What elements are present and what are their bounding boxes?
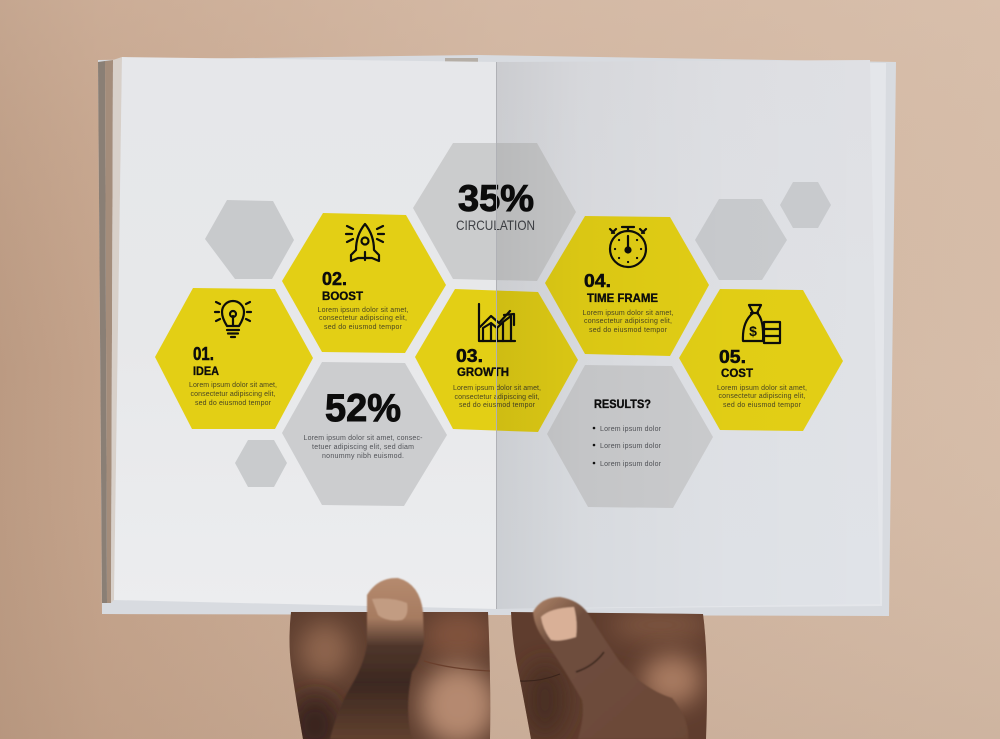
right thumbnail: [541, 607, 577, 641]
hexagon: decorative gray lower left: [235, 440, 287, 487]
icon: light bulb: [215, 301, 251, 337]
bullet list: Lorem ipsum dolor: [600, 426, 662, 433]
spine fold line: [496, 62, 498, 609]
body text: sed do eiusmod tempor: [589, 327, 668, 334]
panel: 02 boost: [282, 213, 446, 353]
panel: 03 growth: [415, 289, 578, 432]
right page: [497, 60, 880, 609]
icon: dollar sign: $: [749, 323, 757, 339]
number: 02: 02.: [322, 269, 347, 289]
bullet list: Lorem ipsum dolor: [600, 443, 662, 450]
left page: [114, 57, 497, 609]
hexagon: decorative gray small right: [780, 182, 831, 228]
page edges on the left: [98, 57, 122, 603]
icon: money bag and coins: [743, 305, 780, 343]
body text: consectetur adipiscing elit,: [319, 315, 407, 322]
body text: tetuer adipiscing elit, sed diam: [312, 444, 414, 451]
cover top band near spine: [445, 58, 478, 62]
body text: Lorem ipsum dolor sit amet,: [453, 385, 541, 392]
number: 04: 04.: [584, 271, 611, 291]
title: growth: GROWTH: [457, 365, 509, 379]
body text: nonummy nibh euismod.: [322, 453, 404, 460]
stat: 52%: 52%: [325, 387, 401, 430]
body text: Lorem ipsum dolor sit amet,: [189, 382, 277, 389]
icon: rocket: [346, 224, 384, 261]
body text: [453, 385, 541, 409]
body text: Lorem ipsum dolor sit amet, consec-: [304, 435, 423, 442]
body text: Lorem ipsum dolor sit amet,: [318, 307, 409, 314]
right thumb knuckle crease: [576, 652, 604, 672]
panel: results list: [547, 365, 713, 508]
panel: 04 time frame: [545, 216, 709, 356]
icon: stopwatch: [610, 227, 646, 267]
body text: [189, 382, 277, 407]
left thumbnail: [372, 598, 407, 620]
number: 03: 03.: [456, 346, 483, 366]
left palm: [285, 610, 496, 739]
number: 05: 05.: [719, 347, 746, 367]
left thumb: [330, 578, 424, 739]
right thumb: [533, 597, 688, 739]
label: circulation: CIRCULATION: [456, 217, 535, 233]
panel: 35% circulation: [413, 143, 576, 281]
body text: Lorem ipsum dolor sit amet,: [717, 385, 807, 392]
body text: sed do eiusmod tempor: [324, 324, 403, 331]
title: cost: COST: [721, 366, 754, 380]
body text: [717, 385, 807, 409]
title: idea: IDEA: [193, 364, 219, 378]
title: results: RESULTS?: [594, 397, 651, 411]
body text: [582, 310, 674, 334]
body text: [304, 435, 423, 460]
body text: sed do eiusmod tempor: [195, 400, 272, 407]
body text: consectetur adipiscing elit,: [584, 318, 672, 325]
right palm: [505, 609, 710, 739]
panel: 52% stat: [282, 362, 447, 506]
body text: sed do eiusmod tempor: [459, 402, 536, 409]
page edges on the right: [497, 62, 886, 609]
body text: consectetur adipiscing elit,: [454, 394, 540, 401]
body text: sed do eiusmod tempor: [723, 402, 802, 409]
book cover: [98, 55, 896, 616]
title: time frame: TIME FRAME: [587, 291, 658, 305]
bullet list: Lorem ipsum dolor: [600, 461, 662, 468]
spine shadow on right page: [497, 60, 880, 609]
body text: consectetur adipiscing elit,: [190, 391, 276, 398]
bullet list: [593, 426, 662, 468]
panel: 05 cost: [679, 289, 843, 431]
number: 01: 01.: [193, 344, 214, 364]
hexagon: decorative gray upper left: [205, 200, 294, 279]
title: boost: BOOST: [322, 289, 364, 303]
hands holding the book: [285, 578, 710, 739]
body text: consectetur adipiscing elit,: [718, 393, 806, 400]
stat: 35%: 35%: [458, 178, 534, 219]
body text: [318, 307, 409, 331]
body text: Lorem ipsum dolor sit amet,: [582, 310, 674, 317]
icon: growth chart: [479, 304, 515, 341]
panel: 01 idea: [155, 288, 313, 429]
hexagon: decorative gray right: [695, 199, 787, 280]
